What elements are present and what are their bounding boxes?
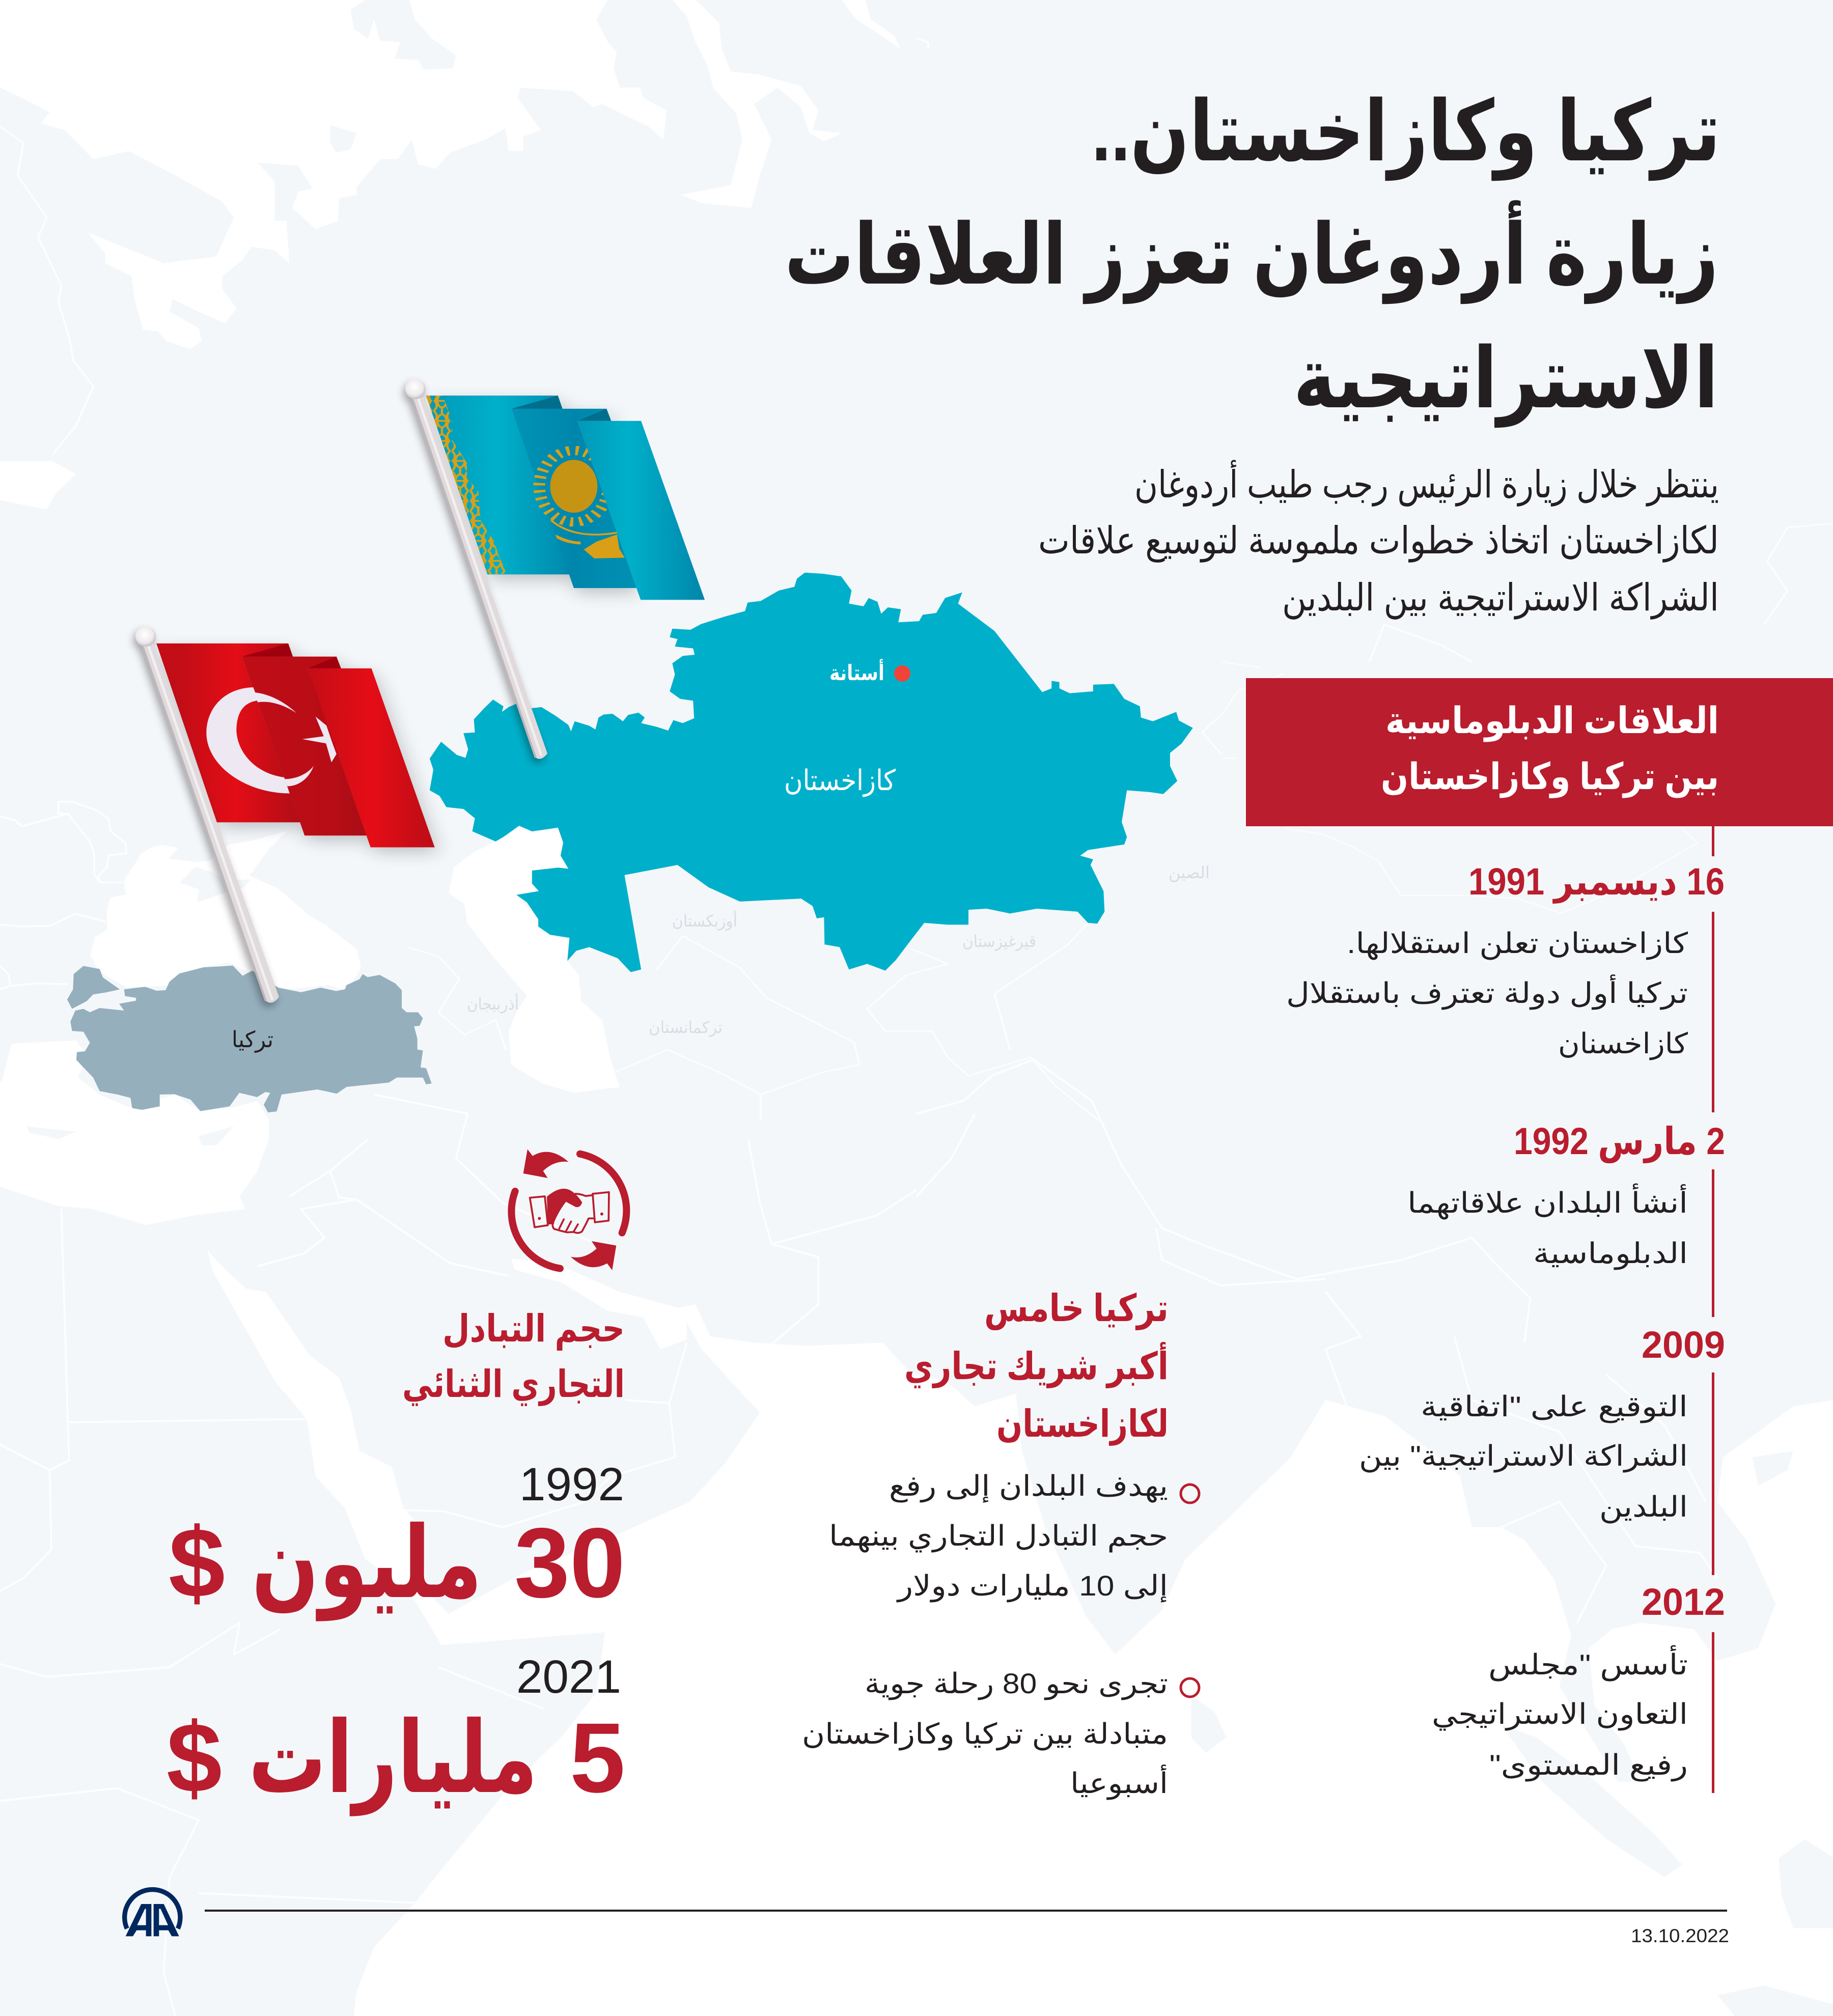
bullet text 1: إلى 10 مليارات دولار bbox=[896, 1570, 1168, 1603]
date: 13.10.2022 bbox=[1631, 1925, 1729, 1946]
sea: Mediterranean, Red Sea, Gulf, western Indian Ocean bbox=[0, 1041, 918, 2016]
bullet text 2: تجرى نحو 80 رحلة جوية bbox=[865, 1667, 1168, 1700]
year 2021: 2021 bbox=[516, 1651, 621, 1703]
title line 3: الاستراتيجية bbox=[1293, 331, 1718, 428]
map label: Kazakhstan: كازاخستان bbox=[784, 764, 896, 797]
bullet marker 2 bbox=[1181, 1678, 1199, 1697]
event: 16 December 1991: كازاخستان تعلن استقلالها. bbox=[1347, 927, 1688, 960]
value 30 million dollars: $ bbox=[169, 1507, 225, 1618]
seas: northern waters bbox=[0, 0, 900, 509]
panel: bilateral trade volume bbox=[166, 1307, 625, 1816]
intro line 2: لكازاخستان اتخاذ خطوات ملموسة لتوسيع علاقات bbox=[1038, 519, 1719, 563]
value 5 billion dollars: 5 bbox=[570, 1702, 625, 1813]
intro text bbox=[1038, 460, 1719, 620]
value 30 million dollars: 30 bbox=[514, 1507, 625, 1618]
event: 16 December 1991: كازاخسنان bbox=[1558, 1027, 1688, 1060]
intro line 3: الشراكة الاستراتيجية بين البلدين bbox=[1282, 576, 1719, 620]
partner heading bbox=[904, 1287, 1169, 1446]
sea: Bay of Bengal and eastern ocean bbox=[913, 1375, 1833, 2016]
timeline rule bbox=[1712, 826, 1714, 1793]
icon: handshake with arrows bbox=[511, 1149, 626, 1270]
event: 2009: 2009 bbox=[1642, 1324, 1725, 1366]
event: 2009: البلدين bbox=[1599, 1491, 1688, 1524]
map label: Astana: أستانة bbox=[829, 659, 884, 685]
flag: Kazakhstan bbox=[426, 396, 705, 600]
event: 2009: الشراكة الاستراتيجية" بين bbox=[1359, 1440, 1688, 1473]
sea: Black Sea bbox=[90, 831, 361, 990]
bullet text 2 bbox=[802, 1667, 1168, 1800]
year 1992: 1992 bbox=[519, 1459, 624, 1510]
map label: China: الصين bbox=[1169, 863, 1210, 882]
capital marker bbox=[894, 665, 910, 682]
footer rule bbox=[205, 1910, 1727, 1912]
bullet text 1: يهدف البلدان إلى رفع bbox=[889, 1470, 1168, 1503]
event: 2012: التعاون الاستراتيجي bbox=[1432, 1698, 1688, 1731]
value 5 billion dollars: $ bbox=[166, 1702, 222, 1813]
flagpole: Turkey bbox=[135, 626, 279, 1003]
sea: Caspian bbox=[449, 828, 619, 1093]
map: Kazakhstan bbox=[430, 573, 1193, 972]
flag ornament bbox=[426, 396, 507, 574]
event: 2012: تأسس "مجلس bbox=[1488, 1645, 1688, 1682]
partner heading: لكازاخستان bbox=[996, 1403, 1169, 1446]
map label: Turkey: تركيا bbox=[232, 1027, 273, 1053]
title bbox=[785, 85, 1720, 428]
event: 2 March 1992: 2 مارس 1992 bbox=[1514, 1120, 1725, 1163]
flagpole: Kazakhstan bbox=[405, 379, 547, 759]
partner heading: أكبر شريك تجاري bbox=[904, 1341, 1169, 1388]
title line 1: تركيا وكازاخستان.. bbox=[1092, 85, 1720, 181]
bullet text 1: حجم التبادل التجاري بينهما bbox=[829, 1520, 1168, 1553]
event: 16 December 1991: تركيا أول دولة تعترف باستقلال bbox=[1286, 974, 1688, 1010]
map label: Azerbaijan: أذربيجان bbox=[467, 993, 519, 1014]
logo: Anadolu Agency bbox=[125, 1890, 180, 1936]
event: 2 March 1992: الدبلوماسية bbox=[1533, 1237, 1688, 1270]
flag sun bbox=[550, 460, 597, 513]
intro line 1: ينتظر خلال زيارة الرئيس رجب طيب أردوغان bbox=[1134, 460, 1719, 507]
header line 1: العلاقات الدبلوماسية bbox=[1385, 701, 1719, 742]
flag: Turkey bbox=[156, 643, 435, 847]
header line 2: بين تركيا وكازاخستان bbox=[1381, 757, 1719, 798]
bullet text 2: متبادلة بين تركيا وكازاخستان bbox=[802, 1718, 1168, 1751]
panel: diplomatic relations header bbox=[1246, 678, 1833, 826]
timeline bbox=[1286, 826, 1725, 1793]
event: 2 March 1992 bbox=[1407, 1120, 1725, 1270]
value 5 billion dollars: مليارات bbox=[248, 1702, 538, 1816]
event: 2009 bbox=[1359, 1324, 1725, 1524]
map label: Turkmenistan: تركمانستان bbox=[649, 1018, 723, 1037]
bullet marker 1 bbox=[1181, 1485, 1199, 1503]
map: Turkey bbox=[67, 966, 432, 1112]
event: 2012 bbox=[1432, 1581, 1725, 1782]
trade heading line 2: التجاري الثنائي bbox=[402, 1363, 625, 1406]
map label: Kyrgyzstan: قيرغيزستان bbox=[962, 932, 1036, 951]
map label: Uzbekistan: أوزبكستان bbox=[672, 910, 737, 931]
event: 2012: رفيع المستوى" bbox=[1489, 1749, 1688, 1782]
bullet text 2: أسبوعيا bbox=[1070, 1765, 1168, 1800]
event: 2009: التوقيع على "اتفاقية bbox=[1421, 1390, 1688, 1423]
partner heading: تركيا خامس bbox=[984, 1287, 1169, 1330]
event: 16 December 1991 bbox=[1286, 860, 1725, 1060]
event: 2012: 2012 bbox=[1642, 1581, 1725, 1623]
trade heading line 1: حجم التبادل bbox=[442, 1307, 625, 1351]
value 30 million dollars bbox=[169, 1507, 625, 1621]
panel: trade partner bbox=[802, 1287, 1199, 1800]
event: 16 December 1991: 16 ديسمبر 1991 bbox=[1468, 860, 1725, 904]
event: 2 March 1992: أنشأ البلدان علاقاتهما bbox=[1407, 1183, 1688, 1220]
bullet text 1 bbox=[829, 1470, 1168, 1603]
value 30 million dollars: مليون bbox=[252, 1507, 482, 1621]
